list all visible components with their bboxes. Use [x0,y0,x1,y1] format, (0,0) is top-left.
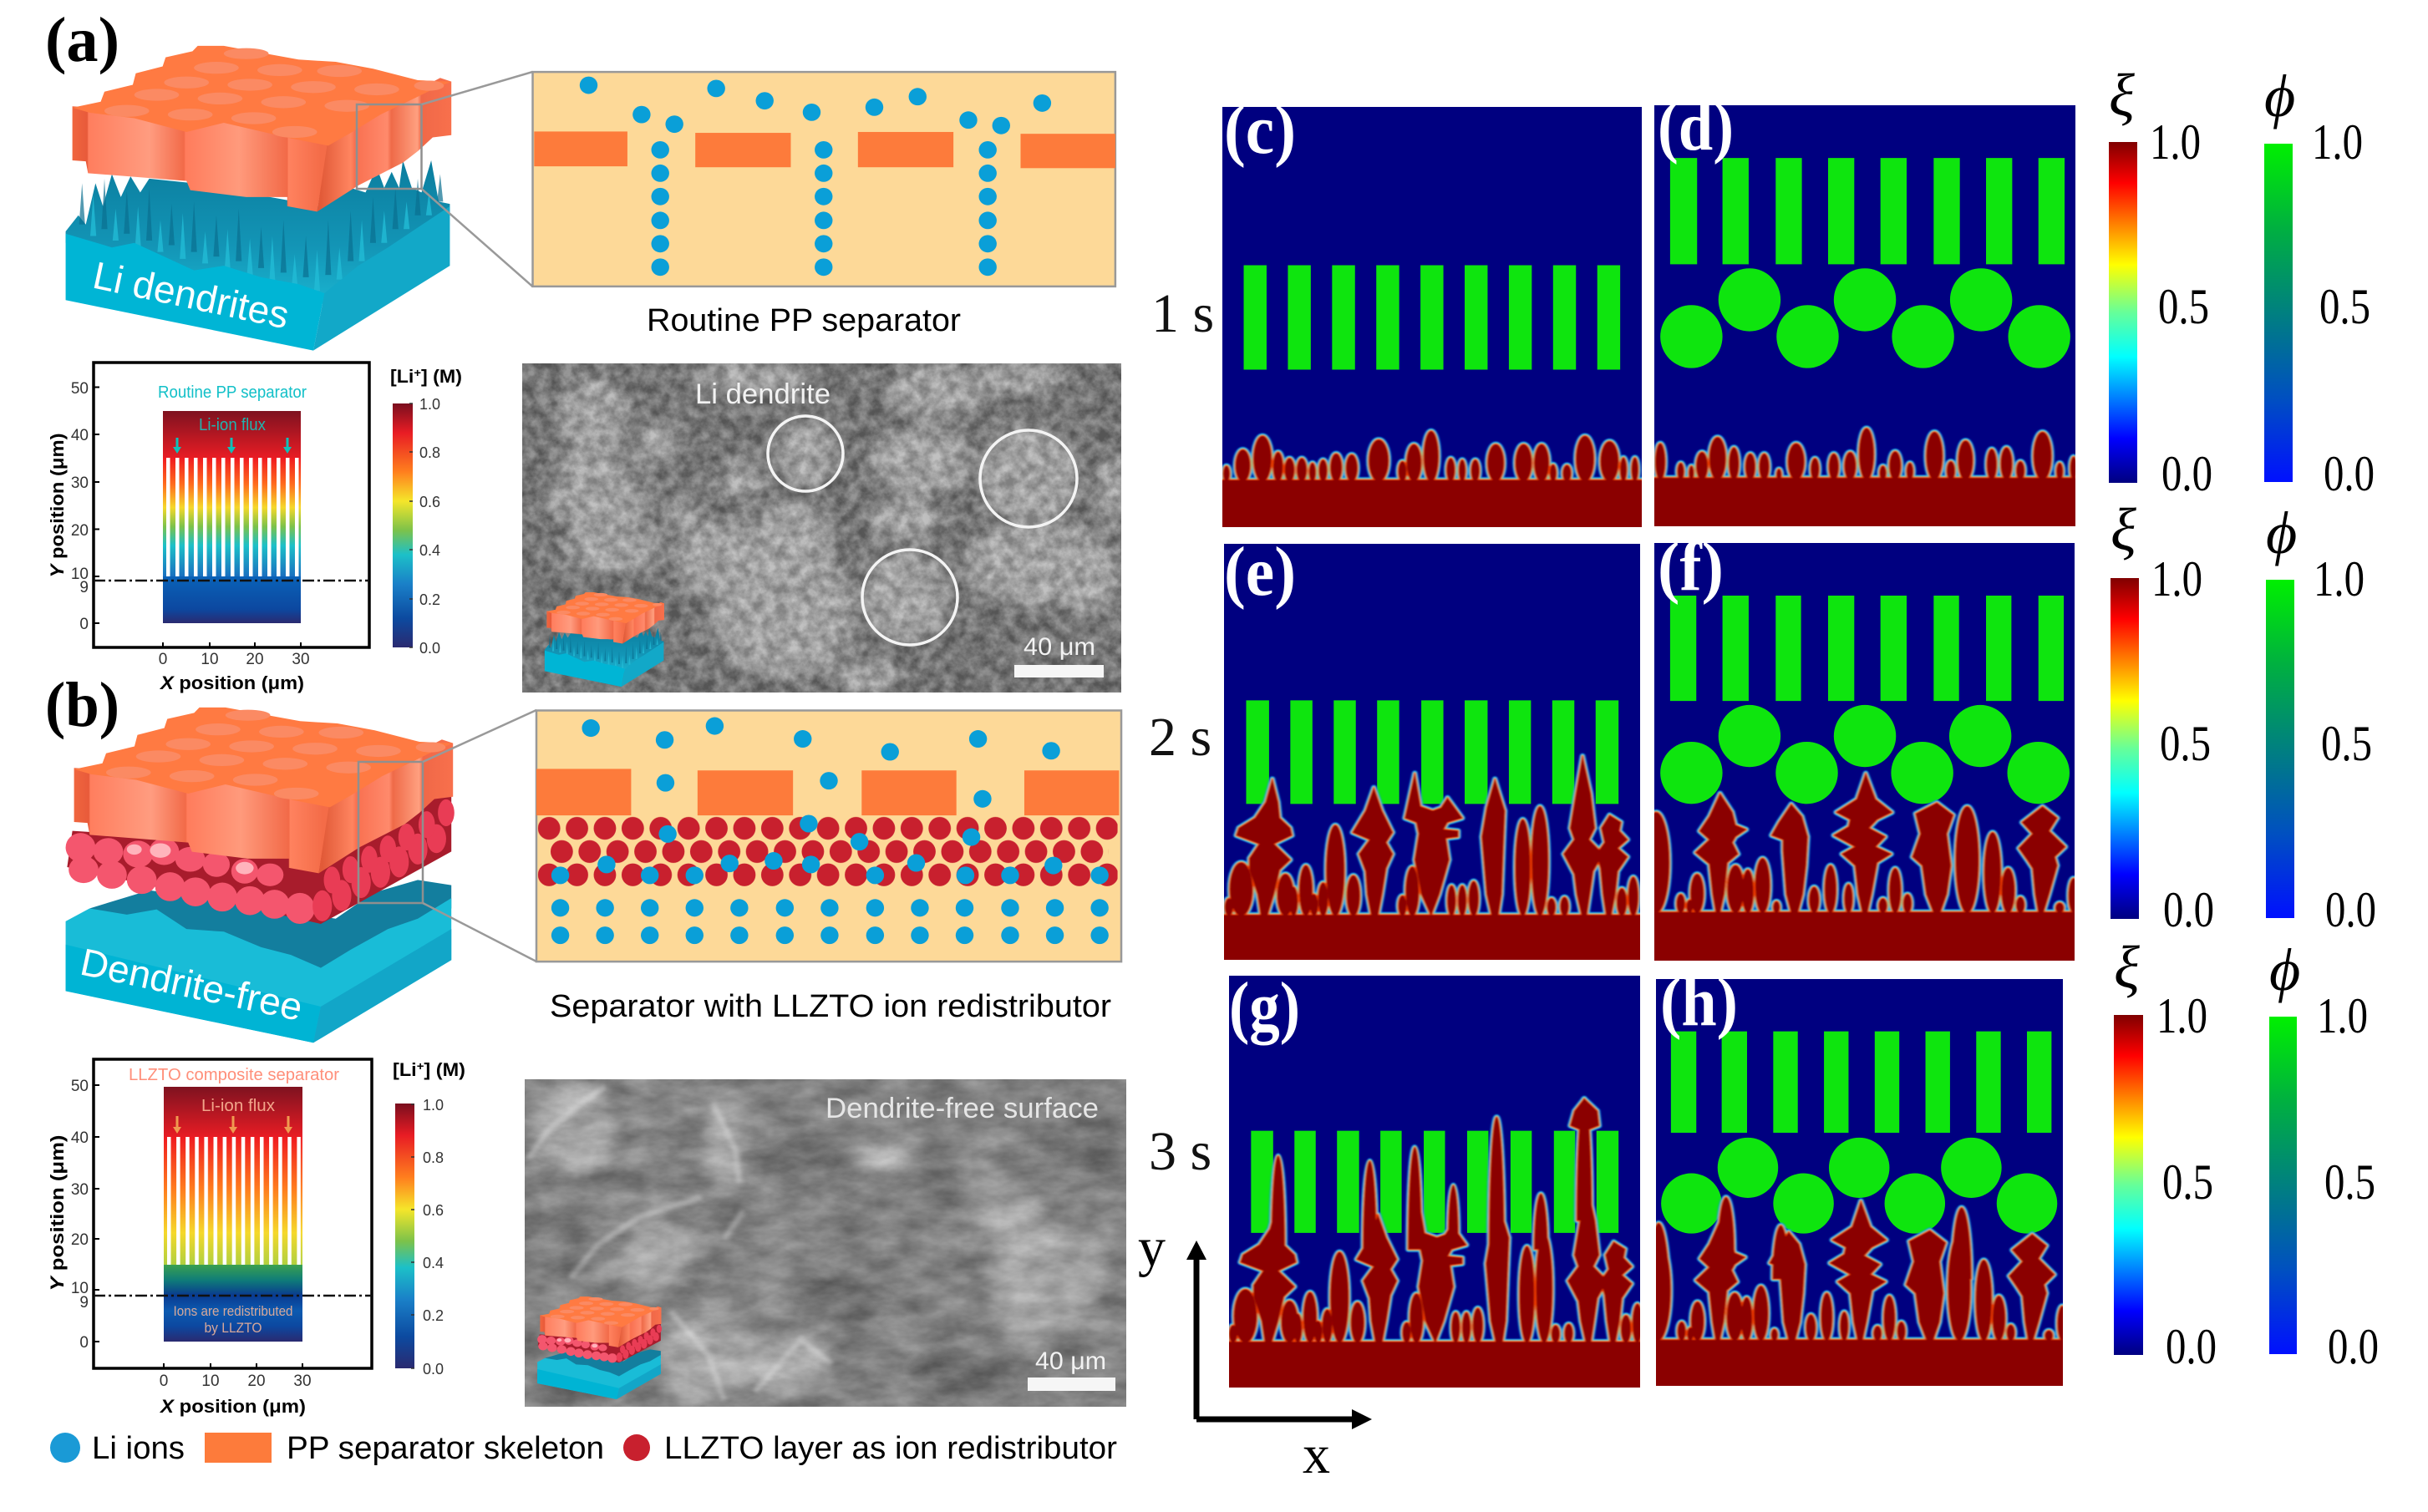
panel: a [45,5,1128,693]
legend: PP separator skeleton [287,1431,604,1466]
legend: LLZTO layer as ion redistributor [664,1431,1117,1466]
legend [50,1431,1117,1466]
panel: f simulation 2 s, with redistributor: (f) [1658,528,1724,606]
chart: Li+ concentration, LLZTO composite separator: 0 [160,1372,168,1390]
colorbars: row 2: 1.0 [2151,551,2202,606]
chart: Li+ concentration, routine PP separator: 0.4 [419,542,440,559]
colorbars: row 3 [2114,934,2379,1374]
chart: Li+ concentration, routine PP separator: 30 [71,474,89,492]
colorbars: row 3: 1.0 [2156,988,2207,1043]
3D illustration: dendrite-free with LLZTO layer: Dendrite-free [77,940,307,1029]
caption: routine PP separator: Routine PP separator [647,303,961,338]
colorbars: row 2: 0.0 [2163,882,2214,937]
schematic: routine PP separator ion flow [533,72,1115,287]
time labels: 2 s [1149,707,1211,768]
chart: Li+ concentration, routine PP separator: [Li [390,366,413,387]
colorbars: row 1: 1.0 [2312,114,2363,170]
colorbars: row 1: 0.0 [2324,446,2375,501]
chart: Li+ concentration, routine PP separator: 10 [201,651,219,668]
chart: Li+ concentration, LLZTO composite separator: X position (μm) [159,1396,306,1417]
chart: Li+ concentration, routine PP separator: 0 [159,651,167,668]
3D illustration: dendrite-free with LLZTO layer [66,708,536,1043]
colorbars: row 1: 0.5 [2158,279,2209,334]
panel: e simulation 2 s, no redistributor: (e) [1224,533,1296,611]
colorbars: row 1: ϕ [2264,63,2295,129]
schematic: separator with LLZTO ion redistributor [536,711,1121,961]
chart: Li+ concentration, LLZTO composite separator: [Li [393,1059,415,1080]
chart: Li+ concentration, LLZTO composite separator: 20 [247,1372,266,1390]
panel label (b): (b) [45,670,119,740]
SEM image: dendrite-free surface: Dendrite-free surface [825,1093,1099,1124]
time labels: 3 s [1149,1121,1211,1182]
chart: Li+ concentration, LLZTO composite separator: Y position (μm) [47,1134,68,1291]
axes arrows: y [1138,1217,1166,1278]
legend: Li ions [92,1431,185,1466]
panel: g simulation 3 s, no redistributor [1229,976,1640,1388]
chart: Li+ concentration, LLZTO composite separator: + [417,1059,424,1073]
SEM image: Li dendrite surface: 40 μm [1024,633,1095,661]
chart: Li+ concentration, routine PP separator: 30 [292,651,310,668]
colorbars: row 3: 0.5 [2324,1154,2375,1210]
colorbars: row 1: 1.0 [2150,114,2201,170]
chart: Li+ concentration, LLZTO composite separator: 20 [71,1231,89,1249]
chart: Li+ concentration, LLZTO composite separator: LLZTO composite separator [129,1066,339,1084]
colorbars: row 1: 0.5 [2319,279,2370,334]
chart: Li+ concentration, routine PP separator [47,363,462,693]
chart: Li+ concentration, LLZTO composite separator: 0.6 [423,1202,444,1219]
chart: Li+ concentration, LLZTO composite separator: 10 [71,1280,89,1297]
chart: Li+ concentration, LLZTO composite separator: 30 [293,1372,312,1390]
chart: Li+ concentration, LLZTO composite separator: 0.4 [423,1255,444,1271]
colorbars: row 2: 0.0 [2325,882,2376,937]
colorbars: row 3: ϕ [2269,936,2300,1003]
time labels [1149,283,1214,1182]
axes arrows [1138,1217,1372,1485]
chart: Li+ concentration, routine PP separator: Routine PP separator [158,383,307,402]
SEM image: dendrite-free surface [525,1078,1126,1408]
colorbars: row 1: 0.0 [2161,446,2212,501]
colorbars: row 3: 0.0 [2166,1319,2217,1374]
panel: d simulation 1 s, with redistributor: (d) [1658,88,1734,165]
panel label (a): (a) [45,5,119,75]
colorbars: row 1: ξ [2109,62,2135,129]
colorbars: row 2: 0.5 [2160,716,2211,771]
chart: Li+ concentration, routine PP separator: Y position (μm) [47,433,68,578]
3D illustration: Li dendrites with routine separator [66,46,533,351]
chart: Li+ concentration, routine PP separator: 0.2 [419,591,440,608]
SEM image: Li dendrite surface: Li dendrite [695,378,830,410]
SEM image: dendrite-free surface: 40 μm [1035,1347,1106,1375]
chart: Li+ concentration, LLZTO composite separator: 10 [201,1372,220,1390]
colorbars: row 2 [2111,496,2376,937]
time labels: 1 s [1151,283,1214,344]
chart: Li+ concentration, routine PP separator: 20 [71,522,89,540]
colorbars: row 2: ϕ [2266,500,2297,566]
chart: Li+ concentration, LLZTO composite separator: 30 [71,1181,89,1199]
chart: Li+ concentration, LLZTO composite separator [47,1059,465,1417]
chart: Li+ concentration, routine PP separator: X position (μm) [159,672,304,693]
colorbars: row 3: 1.0 [2317,988,2368,1043]
panel: h simulation 3 s, with redistributor [1656,979,2063,1386]
chart: Li+ concentration, LLZTO composite separator: 0.0 [423,1361,444,1378]
chart: Li+ concentration, LLZTO composite separator: 50 [71,1078,89,1095]
chart: Li+ concentration, LLZTO composite separator: 0.8 [423,1149,444,1166]
chart: Li+ concentration, routine PP separator: 40 [71,427,89,444]
chart: Li+ concentration, routine PP separator: 20 [246,651,264,668]
colorbars: row 1 [2109,62,2375,501]
chart: Li+ concentration, LLZTO composite separator: Li-ion flux [201,1097,275,1115]
caption: separator with LLZTO ion redistributor: Separator with LLZTO ion redistributor [550,989,1111,1024]
colorbars: row 2: 0.5 [2321,716,2372,771]
chart: Li+ concentration, LLZTO composite separator: Ions are redistributed [174,1303,292,1319]
chart: Li+ concentration, routine PP separator: 0 [79,616,89,633]
SEM image: Li dendrite surface [522,361,1128,693]
panel: d simulation 1 s, with redistributor [1654,105,2075,526]
chart: Li+ concentration, routine PP separator: 0.0 [419,640,440,657]
chart: Li+ concentration, routine PP separator: 9 [79,579,89,596]
chart: Li+ concentration, routine PP separator: 1.0 [419,396,440,413]
chart: Li+ concentration, LLZTO composite separator: 1.0 [423,1097,444,1114]
colorbars: row 3: 0.5 [2162,1154,2213,1210]
colorbars: row 3: ξ [2114,934,2140,1001]
colorbars: row 3: 0.0 [2328,1319,2379,1374]
chart: Li+ concentration, LLZTO composite separator: 40 [71,1129,89,1147]
chart: Li+ concentration, routine PP separator: ] (M) [421,366,462,387]
panel: h simulation 3 s, with redistributor: (h) [1660,963,1738,1041]
3D illustration: Li dendrites with routine separator: Li dendrites [89,253,293,337]
chart: Li+ concentration, routine PP separator: 0.6 [419,494,440,510]
panel: e simulation 2 s, no redistributor [1224,544,1640,960]
panel: f simulation 2 s, with redistributor [1654,543,2075,961]
colorbars: row 2: ξ [2111,496,2136,563]
panel: b [45,670,1126,1417]
panel: c simulation 1 s, no redistributor: (c) [1224,91,1296,169]
chart: Li+ concentration, routine PP separator: 50 [71,380,89,398]
chart: Li+ concentration, routine PP separator: Li-ion flux [199,416,266,434]
panel: c simulation 1 s, no redistributor [1222,107,1642,527]
chart: Li+ concentration, LLZTO composite separator: 0 [79,1334,89,1352]
chart: Li+ concentration, LLZTO composite separator: by LLZTO [204,1320,262,1336]
colorbars: row 2: 1.0 [2314,551,2365,606]
chart: Li+ concentration, LLZTO composite separator: ] (M) [424,1059,465,1080]
chart: Li+ concentration, routine PP separator: 10 [71,566,89,583]
chart: Li+ concentration, LLZTO composite separator: 9 [79,1294,89,1312]
axes arrows: x [1303,1424,1330,1485]
panel: g simulation 3 s, no redistributor: (g) [1229,968,1300,1046]
chart: Li+ concentration, routine PP separator: 0.8 [419,444,440,461]
chart: Li+ concentration, LLZTO composite separator: 0.2 [423,1307,444,1324]
chart: Li+ concentration, routine PP separator: + [414,366,421,379]
